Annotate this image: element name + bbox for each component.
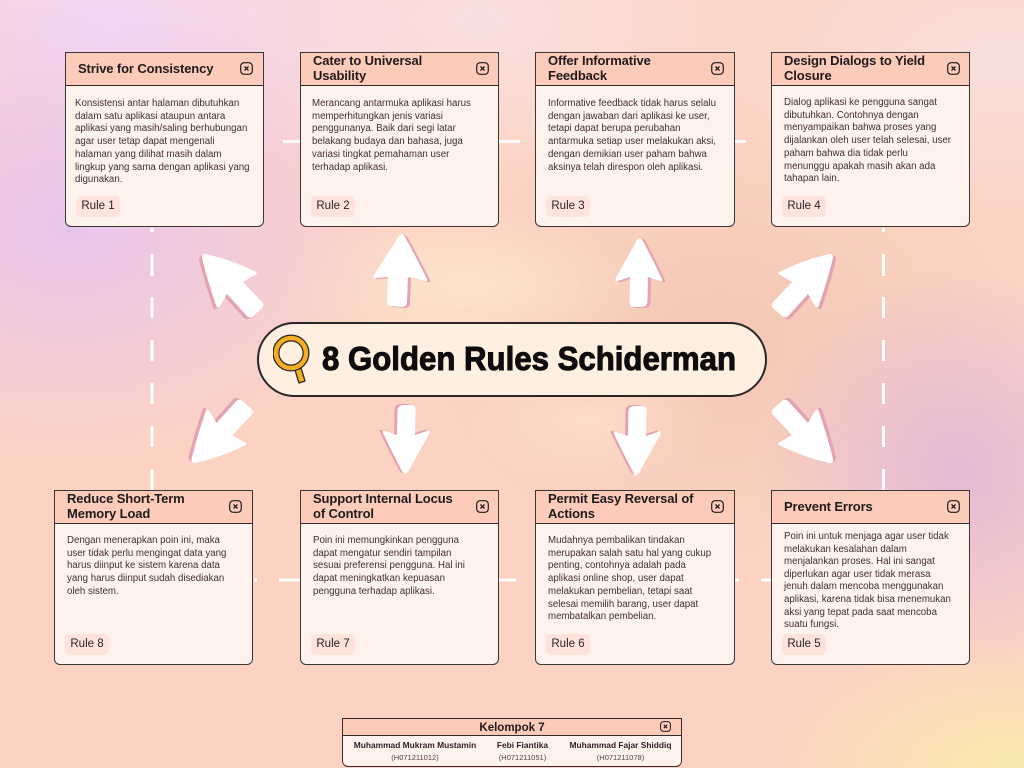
heading: rule 7 [301, 491, 498, 524]
heading: rule 5 [772, 491, 969, 524]
text: rule 4: dibutuhkan. Contohnya dengan [784, 110, 919, 121]
member 2: Febi Fiantika [497, 740, 548, 750]
label: rule 2 [311, 196, 355, 217]
panel: rule 8 [54, 490, 253, 665]
heading: rule 1: Strive for Consistency [78, 60, 213, 76]
member 1 [354, 740, 476, 762]
heading: rule 8: Memory Load [67, 506, 150, 521]
member 2 [497, 740, 548, 762]
heading: rule 4: Design Dialogs to Yield [784, 53, 925, 68]
panel: rule 7 [300, 490, 499, 665]
text: rule 3: Informative feedback tidak harus selalu [548, 98, 716, 109]
text: rule 6: membatalkan pembelian. [548, 611, 656, 622]
heading: rule 3 [536, 53, 734, 86]
icon: magnifying glass [273, 334, 310, 384]
text: rule 4 [784, 97, 951, 184]
text: rule 2: terhadap aplikasi. [312, 162, 388, 173]
text: rule 5: jenuh dalam mencoba menggunakan [784, 581, 943, 592]
text: rule 2: belakang budaya dan bahasa, juga [312, 136, 463, 147]
text: rule 3: dengan jawaban dari aplikasi ke user, [548, 111, 710, 122]
member 3 [570, 740, 671, 762]
text: rule 8: harus diinput ke sistem karena data [67, 560, 220, 571]
text: rule 1: agar user tetap dapat mengenali [75, 136, 214, 147]
text: rule 6: penting, contohnya adalah pada [548, 560, 686, 571]
text: rule 5: aksi yang tepat pada saat mencoba [784, 607, 937, 618]
heading: rule 7: Support Internal Locus [313, 491, 453, 506]
text: rule 4: Dialog aplikasi ke pengguna sangat [784, 97, 937, 108]
label: rule 6: Rule 6 [551, 638, 585, 650]
label: rule 8 [65, 634, 109, 655]
member 3: Muhammad Fajar Shiddiq [570, 740, 671, 750]
label: rule 7: Rule 7 [316, 638, 350, 650]
text: rule 1: Konsistensi antar halaman dibutuhkan [75, 98, 239, 109]
text: rule 7: sesuai preferensi pengguna. Hal ini [313, 560, 465, 571]
text: rule 1: aplikasi yang masih/saling berhubungan [75, 123, 247, 134]
arrow to rule 7 [380, 404, 430, 474]
text: rule 4: menyampaikan bahwa proses yang [784, 122, 936, 133]
heading: rule 8 [55, 491, 252, 524]
text: rule 8: Dengan menerapkan poin ini, maka [67, 535, 220, 546]
text: rule 8: oleh sistem. [67, 586, 119, 597]
heading: rule 2 [301, 53, 498, 86]
text: rule 3: aksinya telah direspon oleh aplikasi. [548, 162, 703, 173]
heading: rule 6: Actions [548, 506, 595, 521]
heading: main title: 8 Golden Rules Schiderman [322, 340, 736, 377]
arrow to rule 2 [373, 234, 430, 308]
text: rule 5: diperlukan agar user tidak merasa [784, 569, 930, 580]
text: rule 2 [312, 98, 471, 173]
text: rule 7: dapat meningkatkan kepuasan [313, 573, 445, 584]
heading: rule 3: Feedback [548, 68, 607, 83]
label: rule 2: Rule 2 [316, 200, 350, 212]
panel: rule 1 [65, 52, 264, 227]
heading: rule 4 [772, 53, 969, 86]
heading: team name: Kelompok 7 [479, 722, 545, 734]
label: rule 4 [782, 196, 826, 217]
heading: rule 5: Prevent Errors [784, 498, 873, 514]
heading: rule 2: Usability [313, 68, 366, 83]
member 2: (H071211051) [499, 752, 546, 762]
text: rule 5: menjalankan proses. Hal ini sangat [784, 556, 935, 567]
text: rule 8 [67, 535, 226, 597]
panel: rule 6 [535, 490, 735, 665]
text: rule 5: aplikasi, karena tidak bisa menemukan [784, 594, 951, 605]
panel: rule 2 [300, 52, 499, 227]
text: rule 5 [784, 531, 951, 630]
text: rule 5: suatu fungsi. [784, 619, 839, 630]
heading: rule 7: of Control [313, 506, 374, 521]
text: rule 5: Poin ini untuk menjaga agar user tidak [784, 531, 949, 542]
heading: rule 8: Reduce Short-Term [67, 491, 185, 506]
member 1: Muhammad Mukram Mustamin [354, 740, 476, 750]
text: rule 8: user tidak perlu mengingat data yang [67, 548, 226, 559]
label: rule 1 [76, 196, 120, 217]
text: rule 6: Mudahnya pembalikan tindakan [548, 535, 685, 546]
text: rule 1: digunakan. [75, 174, 122, 185]
heading: rule 6: Permit Easy Reversal of [548, 491, 693, 506]
text: rule 6 [548, 535, 711, 622]
text: rule 3 [548, 98, 716, 173]
text: rule 6: melakukan pembelian, tetapi saat [548, 586, 692, 597]
text: rule 4: dijalankan oleh user telah selesai, user [784, 135, 951, 146]
panel: rule 3 [535, 52, 735, 227]
arrow to rule 1 [199, 254, 263, 319]
arrow to rule 4 [772, 254, 836, 319]
member 3: (H071211078) [597, 752, 644, 762]
heading: rule 2: Cater to Universal [313, 53, 422, 68]
text: rule 1 [75, 98, 250, 185]
text: rule 1: halaman yang dilihat masih dalam [75, 149, 221, 160]
panel: rule 4 [771, 52, 970, 227]
text: rule 7: pengguna terhadap aplikasi. [313, 586, 435, 597]
text: rule 4: tahapan lain. [784, 173, 839, 184]
label: rule 3: Rule 3 [551, 200, 585, 212]
label: rule 8: Rule 8 [70, 638, 104, 650]
text: rule 2: Merancang antarmuka aplikasi harus [312, 98, 471, 109]
arrow to rule 6 [611, 405, 661, 475]
label: rule 4: Rule 4 [787, 200, 821, 212]
heading: rule 6 [536, 491, 734, 524]
text: rule 3: dengan demikian user paham bahwa [548, 149, 707, 160]
label: rule 7 [311, 634, 355, 655]
arrow to rule 3 [615, 238, 665, 308]
member 1: (H071211012) [391, 752, 439, 762]
label: rule 5 [782, 634, 826, 655]
text: rule 7: Poin ini memungkinkan pengguna [313, 535, 459, 546]
panel: rule 5 [771, 490, 970, 665]
label: rule 5: Rule 5 [787, 638, 821, 650]
text: rule 4: menunggu apakah masih akan ada [784, 161, 935, 172]
text: rule 2: memperhitungkan jenis variasi [312, 111, 443, 122]
heading: team name [343, 719, 681, 736]
panel: team credits [342, 718, 682, 767]
text: rule 1: dalam satu aplikasi ataupun antara [75, 111, 225, 122]
arrow to rule 5 [772, 398, 836, 463]
text: rule 3: antarmuka setiap user melakukan aksi, [548, 136, 716, 147]
text: rule 8: yang harus diinput sudah disediakan [67, 573, 224, 584]
heading: rule 1 [66, 53, 263, 86]
text: rule 3: tetapi dapat berupa perubahan [548, 123, 681, 134]
text: rule 7 [313, 535, 465, 597]
text: rule 7: dapat mengatur sendiri tampilan [313, 548, 451, 559]
label: rule 1: Rule 1 [81, 200, 115, 212]
text: rule 1: lingkup yang sama dengan aplikasi yang [75, 162, 250, 173]
label: rule 3 [546, 196, 590, 217]
text: rule 4: paham bahwa dia tidak perlu [784, 148, 908, 159]
text: rule 5: melakukan kesalahan dalam [784, 544, 907, 555]
text: rule 6: aplikasi online shop, user dapat [548, 573, 684, 584]
label: rule 6 [546, 634, 590, 655]
arrow to rule 8 [188, 398, 253, 463]
heading: rule 3: Offer Informative [548, 53, 651, 68]
text: rule 6: selesai memilih barang, user dapat [548, 599, 698, 610]
heading: rule 4: Closure [784, 68, 832, 83]
text: rule 2: variasi tingkat pemahaman user [312, 149, 449, 160]
text: rule 2: penggunanya. Baik dari segi latar [312, 123, 456, 134]
text: rule 6: merupakan salah satu hal yang cukup [548, 548, 711, 559]
panel: title [257, 322, 767, 397]
